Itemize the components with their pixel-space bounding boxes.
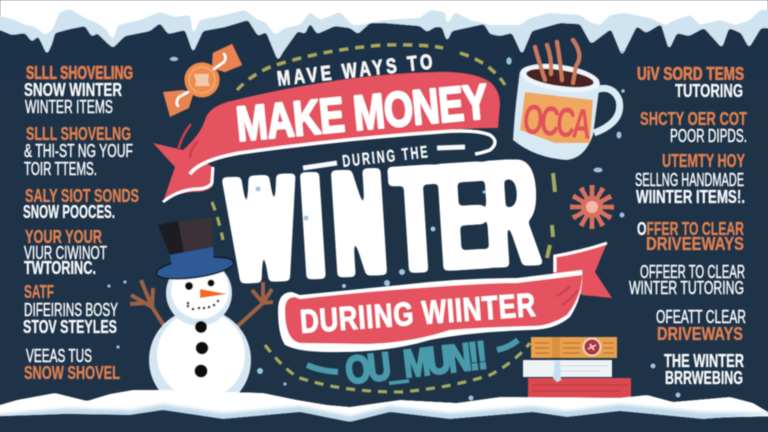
tip: left 6	[24, 346, 120, 383]
book: white	[523, 360, 612, 382]
red banner: during winter	[278, 243, 612, 352]
tip: left 1: SLLL SHOVELING	[26, 63, 133, 83]
buttons	[194, 321, 208, 404]
arms	[130, 280, 273, 338]
snowman body	[149, 309, 251, 411]
tip: left 5: SATF	[24, 282, 54, 302]
tip: left 4: VIUR CIWINOT	[24, 243, 107, 263]
title line: mave ways to: MAVE WAYS TO	[276, 49, 434, 90]
tip: left 2	[24, 124, 133, 179]
bottom snow bank	[0, 390, 768, 422]
tip: left 3	[23, 186, 139, 222]
text block: right column	[629, 64, 747, 388]
tip: left 1: WINTER ITEMS	[25, 97, 113, 117]
tip: left 6: VEEAS TUS	[26, 346, 92, 366]
tip: left 1: SNOW WINTER	[24, 80, 122, 100]
top hat	[155, 217, 235, 283]
text block: left column	[23, 63, 139, 383]
snowman head	[166, 260, 232, 326]
banner text: make money: MAKE MONEY	[234, 75, 490, 152]
eyes	[185, 280, 219, 310]
tip: right 1	[637, 64, 744, 101]
icon: snowflake	[571, 186, 613, 228]
teal slogan: OU_MUN!!	[343, 333, 490, 393]
tip: left 1	[24, 63, 133, 117]
icon: cocoa mug	[513, 40, 620, 160]
tip: left 2: SLLL SHOVELNG	[26, 124, 131, 144]
book: orange	[531, 337, 617, 358]
tip: right 4	[637, 219, 744, 254]
tip: left 3: SNOW POOCES.	[23, 202, 115, 222]
tip: right 5	[629, 262, 745, 298]
icon: stack of books	[523, 337, 631, 398]
red banner: make money	[153, 72, 500, 202]
tip: right 6: DRIVEWAYS	[657, 324, 743, 344]
tip: left 5: STOV STEYLES	[23, 317, 117, 337]
tip: right 2	[640, 109, 747, 146]
title line: during the: DURING THE	[341, 143, 429, 172]
tip: right 7	[664, 351, 744, 388]
steam	[535, 40, 579, 83]
banner text: during winter: DURIING WIINTER	[299, 287, 536, 341]
tip: left 6: SNOW SHOVEL	[24, 363, 120, 383]
mug label: OCCA	[521, 96, 593, 149]
carrot nose	[200, 289, 227, 298]
tip: right 3	[635, 151, 745, 207]
top snow and icicles	[0, 0, 768, 80]
tip: left 3: SALY SIOT SONDS	[25, 186, 139, 206]
big heading: winter: WINTER	[224, 126, 542, 315]
snowman	[130, 217, 273, 411]
tip: left 5: DIFEIRINS BOSY	[24, 300, 118, 320]
tip: left 2: TOIR TTEMS.	[24, 159, 97, 179]
tip: right 6	[656, 307, 746, 344]
tip: right 1: TUTORING	[675, 81, 743, 101]
tip: left 4: YOUR YOUR	[25, 227, 102, 247]
title line: during the	[303, 143, 465, 172]
tip: right 4: DRIVEEWAYS	[646, 234, 744, 254]
falling snow particles	[107, 50, 680, 400]
dashed ornamental border	[212, 45, 555, 392]
teal slogan	[307, 333, 518, 393]
icon: wrapped candy	[163, 44, 242, 117]
tip: left 5	[23, 282, 118, 337]
tip: left 2: & THI-ST NG YOUF	[24, 141, 133, 161]
book: red	[528, 378, 631, 398]
tip: left 4	[24, 227, 107, 278]
tip: left 4: TWTORINC.	[24, 258, 96, 278]
